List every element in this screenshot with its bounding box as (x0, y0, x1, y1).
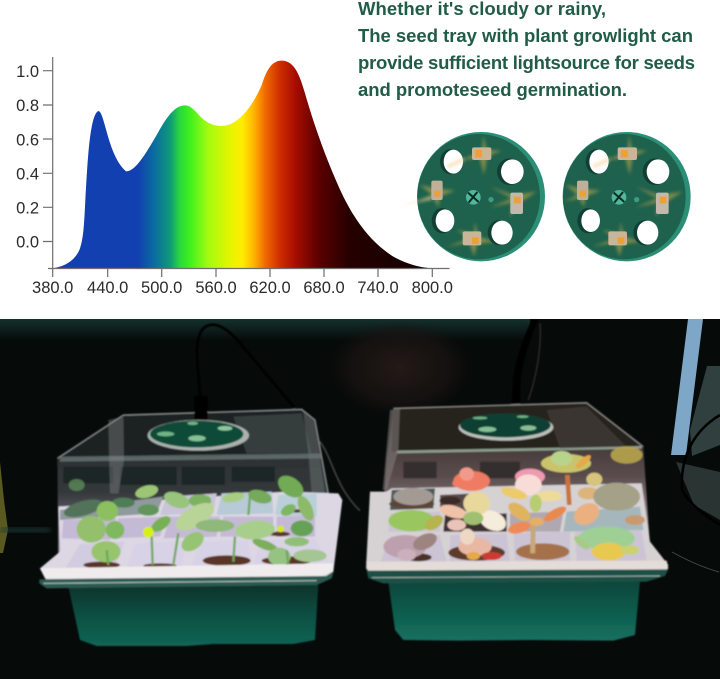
tray rim (39, 563, 334, 588)
seedlings (62, 471, 327, 566)
holes (432, 149, 524, 245)
spectrum chart (16, 57, 453, 297)
y axis labels: 0.4 (16, 166, 39, 184)
heading text: The seed tray with plant growlight can (358, 25, 693, 46)
lid light disc (148, 420, 249, 451)
y axis labels: 0.0 (16, 234, 39, 252)
power cable (511, 320, 538, 415)
x axis labels: 740.0 (357, 279, 399, 297)
x axis labels: 800.0 (412, 279, 453, 297)
tray white insert (40, 492, 342, 581)
monitor and desk clutter (671, 319, 720, 572)
LEDs (431, 147, 523, 245)
USB plug (194, 396, 208, 420)
y axis labels: 0.8 (16, 97, 39, 115)
x axis labels: 680.0 (303, 279, 345, 297)
LED disc right (563, 132, 691, 261)
tray white insert (366, 483, 668, 573)
x axis labels (32, 279, 453, 297)
heading text (358, 0, 695, 100)
lid light disc (459, 413, 553, 441)
soil (83, 509, 312, 568)
tray base body (68, 585, 318, 646)
right tray with succulents (366, 320, 668, 641)
axes (43, 57, 450, 277)
power cable (197, 325, 295, 408)
tray base body (388, 582, 640, 641)
light flares (418, 135, 537, 257)
heading text: and promoteseed germination. (358, 79, 627, 100)
x axis labels: 620.0 (249, 279, 291, 297)
yellow object at left edge (0, 462, 8, 553)
succulents (383, 446, 645, 561)
spectrum curve (53, 61, 432, 268)
heading text: provide sufficient lightsource for seeds (358, 52, 695, 73)
LED disc left (400, 132, 545, 261)
centre screw (466, 190, 481, 205)
x axis labels: 440.0 (87, 279, 128, 297)
y axis labels: 1.0 (16, 63, 39, 81)
y axis labels: 0.2 (16, 200, 39, 218)
x axis labels: 560.0 (195, 279, 237, 297)
flare outside disc (400, 196, 432, 206)
y axis labels: 0.6 (16, 132, 39, 150)
y axis labels (16, 63, 39, 252)
tray rim (366, 561, 668, 583)
photo background (0, 319, 720, 679)
x axis labels: 500.0 (141, 279, 182, 297)
clear dome (57, 409, 328, 560)
x axis labels: 380.0 (32, 279, 73, 297)
clear dome (381, 403, 650, 550)
soil (389, 497, 569, 561)
left tray with seedlings (39, 325, 360, 646)
